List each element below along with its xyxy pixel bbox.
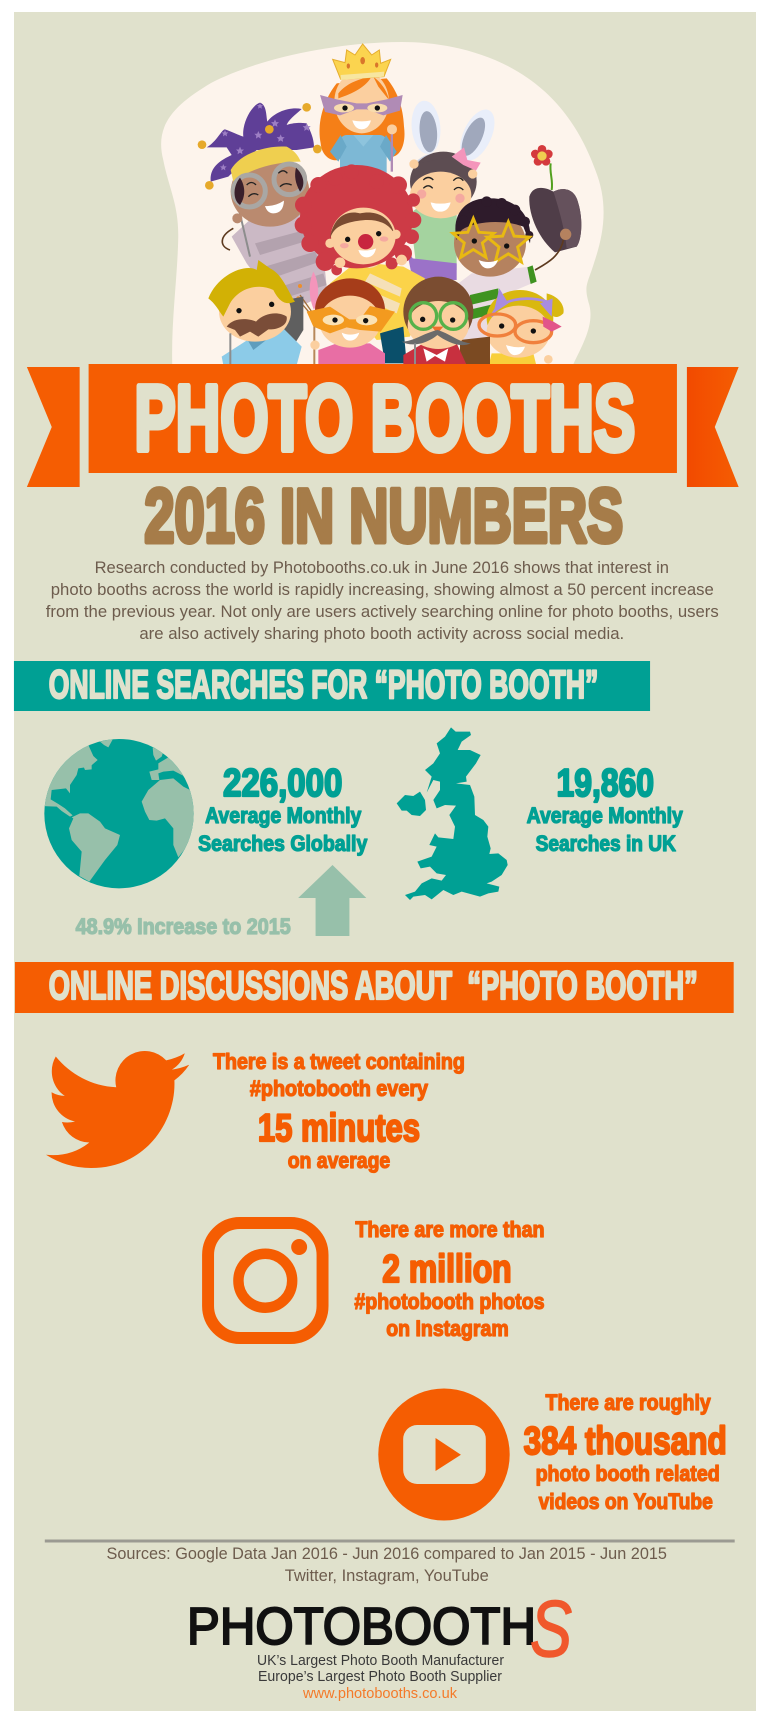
intro text — [46, 559, 719, 643]
stat: instagram: There are more than — [355, 1217, 545, 1242]
jester child with grey glasses — [198, 103, 327, 303]
girl with orange dotted mask and feather — [296, 272, 395, 365]
stat: twitter: #photobooth every — [250, 1076, 429, 1101]
stat: twitter: on average — [288, 1148, 390, 1173]
stat: instagram: 2 million — [382, 1248, 512, 1291]
banner: right ribbon tail — [687, 367, 739, 487]
stat: twitter: 15 minutes — [258, 1107, 420, 1150]
boy with star glasses — [453, 196, 537, 340]
stat: instagram: #photobooth photos — [354, 1289, 545, 1314]
stat: youtube — [524, 1390, 727, 1514]
logo: photobooths — [187, 1584, 572, 1673]
stat: global searches: Searches Globally — [198, 831, 368, 856]
clown with red wig — [295, 164, 425, 363]
stat: youtube: videos on YouTube — [539, 1489, 713, 1514]
stat: UK searches: 19,860 — [556, 762, 654, 805]
banner: main ribbon — [89, 364, 677, 473]
logo: photobooths: S — [530, 1584, 572, 1673]
intro text: Research conducted by Photobooths.co.uk in June 2016 shows that interest in — [95, 559, 669, 577]
stat: UK searches: Searches in UK — [536, 831, 676, 856]
icon: youtube — [378, 1388, 510, 1520]
child with bunny ears — [406, 100, 502, 280]
logo taglines: UK’s Largest Photo Booth Manufacturer — [257, 1653, 504, 1669]
girl with crown and purple mask — [320, 44, 405, 182]
stat: UK searches — [527, 762, 684, 856]
stat: UK searches: Average Monthly — [527, 803, 684, 828]
intro text: are also actively sharing photo booth activity across social media. — [139, 625, 624, 643]
logo: photobooths: PHOTOBOOTH — [187, 1598, 536, 1656]
logo taglines: Europe’s Largest Photo Booth Supplier — [258, 1669, 502, 1685]
icon: instagram — [208, 1223, 323, 1338]
sources — [107, 1545, 667, 1585]
blond boy with brown moustache — [208, 260, 303, 365]
stat: twitter: There is a tweet containing — [213, 1049, 465, 1074]
illustration: group of children with photo booth props — [198, 44, 581, 367]
intro text: photo booths across the world is rapidly increasing, showing almost a 50 percent increase — [51, 581, 714, 599]
illustration backdrop blob — [161, 42, 604, 364]
banner: left ribbon tail — [27, 367, 80, 487]
icon: twitter bird — [46, 1051, 189, 1168]
stat: instagram — [354, 1217, 545, 1341]
boy with green glasses and grey moustache — [402, 277, 490, 365]
stat: youtube: 384 thousand — [524, 1420, 727, 1463]
increase label: 48.9% Increase to 2015 — [76, 914, 291, 939]
hat and flower — [529, 145, 581, 270]
stat: youtube: photo booth related — [536, 1461, 720, 1486]
stat: global searches: Average Monthly — [205, 803, 362, 828]
stat: twitter — [213, 1049, 465, 1173]
stat: global searches — [198, 762, 368, 856]
icon: globe — [37, 738, 197, 888]
stat: youtube: There are roughly — [546, 1390, 711, 1415]
logo taglines — [257, 1653, 504, 1702]
stat: global searches: 226,000 — [223, 762, 342, 805]
arrow: increase — [298, 865, 366, 936]
sources: Sources: Google Data Jan 2016 - Jun 2016 compared to Jan 2015 - Jun 2015 — [107, 1545, 667, 1563]
sources: Twitter, Instagram, YouTube — [285, 1567, 489, 1585]
icon: UK map — [397, 727, 508, 900]
intro text: from the previous year. Not only are users actively searching online for photo booths, users — [46, 603, 719, 621]
logo taglines: www.photobooths.co.uk — [302, 1686, 458, 1702]
stat: instagram: on Instagram — [386, 1316, 509, 1341]
girl with cat ears and orange glasses — [479, 288, 564, 367]
